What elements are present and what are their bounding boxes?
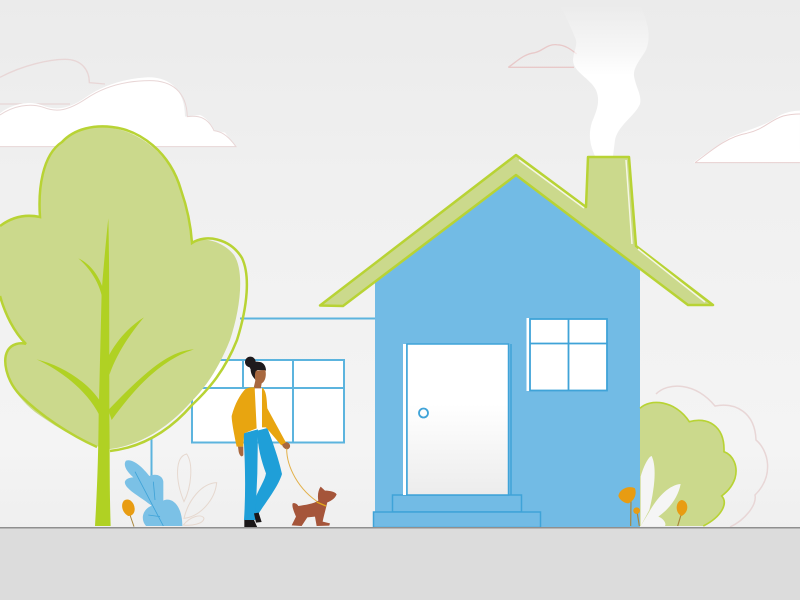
- head and neck: [253, 370, 266, 389]
- leash: [287, 449, 320, 503]
- hair bun: [245, 357, 266, 380]
- door step lower: [374, 512, 540, 528]
- door frame right: [510, 344, 512, 495]
- door highlight: [403, 344, 406, 495]
- ground line: [0, 527, 800, 528]
- tree trunk and branches: [37, 218, 194, 526]
- jacket: [232, 387, 257, 447]
- roof highlight: [519, 160, 705, 302]
- right bush outline: [656, 386, 768, 527]
- right orange flowers: [618, 487, 687, 526]
- back house outline: [152, 318, 375, 482]
- roof and chimney: [320, 155, 713, 306]
- dog: [292, 487, 337, 526]
- jacket right and arm: [262, 388, 286, 445]
- cloud: large white left: [0, 77, 236, 147]
- white top: [255, 388, 264, 429]
- ground: [0, 528, 800, 600]
- tree: [0, 126, 247, 526]
- front window: [526, 318, 607, 391]
- right green bush: [640, 402, 736, 526]
- hands: [238, 442, 290, 456]
- left shrub outline plant: [178, 454, 217, 525]
- back house window: [192, 360, 344, 442]
- tree canopy: [0, 126, 247, 451]
- cloud: white right: [693, 111, 800, 163]
- door: [407, 344, 508, 495]
- shoes: [244, 513, 262, 527]
- left blue leafy plant: [125, 460, 182, 526]
- white bush leaves: [641, 456, 681, 526]
- cloud: upper left outline: [0, 59, 105, 104]
- house: [320, 155, 713, 528]
- right leg: [254, 428, 282, 514]
- house body: [375, 176, 640, 527]
- left orange flower: [122, 500, 135, 527]
- chimney smoke: [560, 5, 649, 156]
- door step upper: [392, 495, 522, 512]
- left leg: [243, 429, 258, 520]
- woman walking dog: [232, 357, 337, 527]
- door knob: [419, 408, 428, 418]
- cloud: small upper centre outline: [508, 45, 577, 67]
